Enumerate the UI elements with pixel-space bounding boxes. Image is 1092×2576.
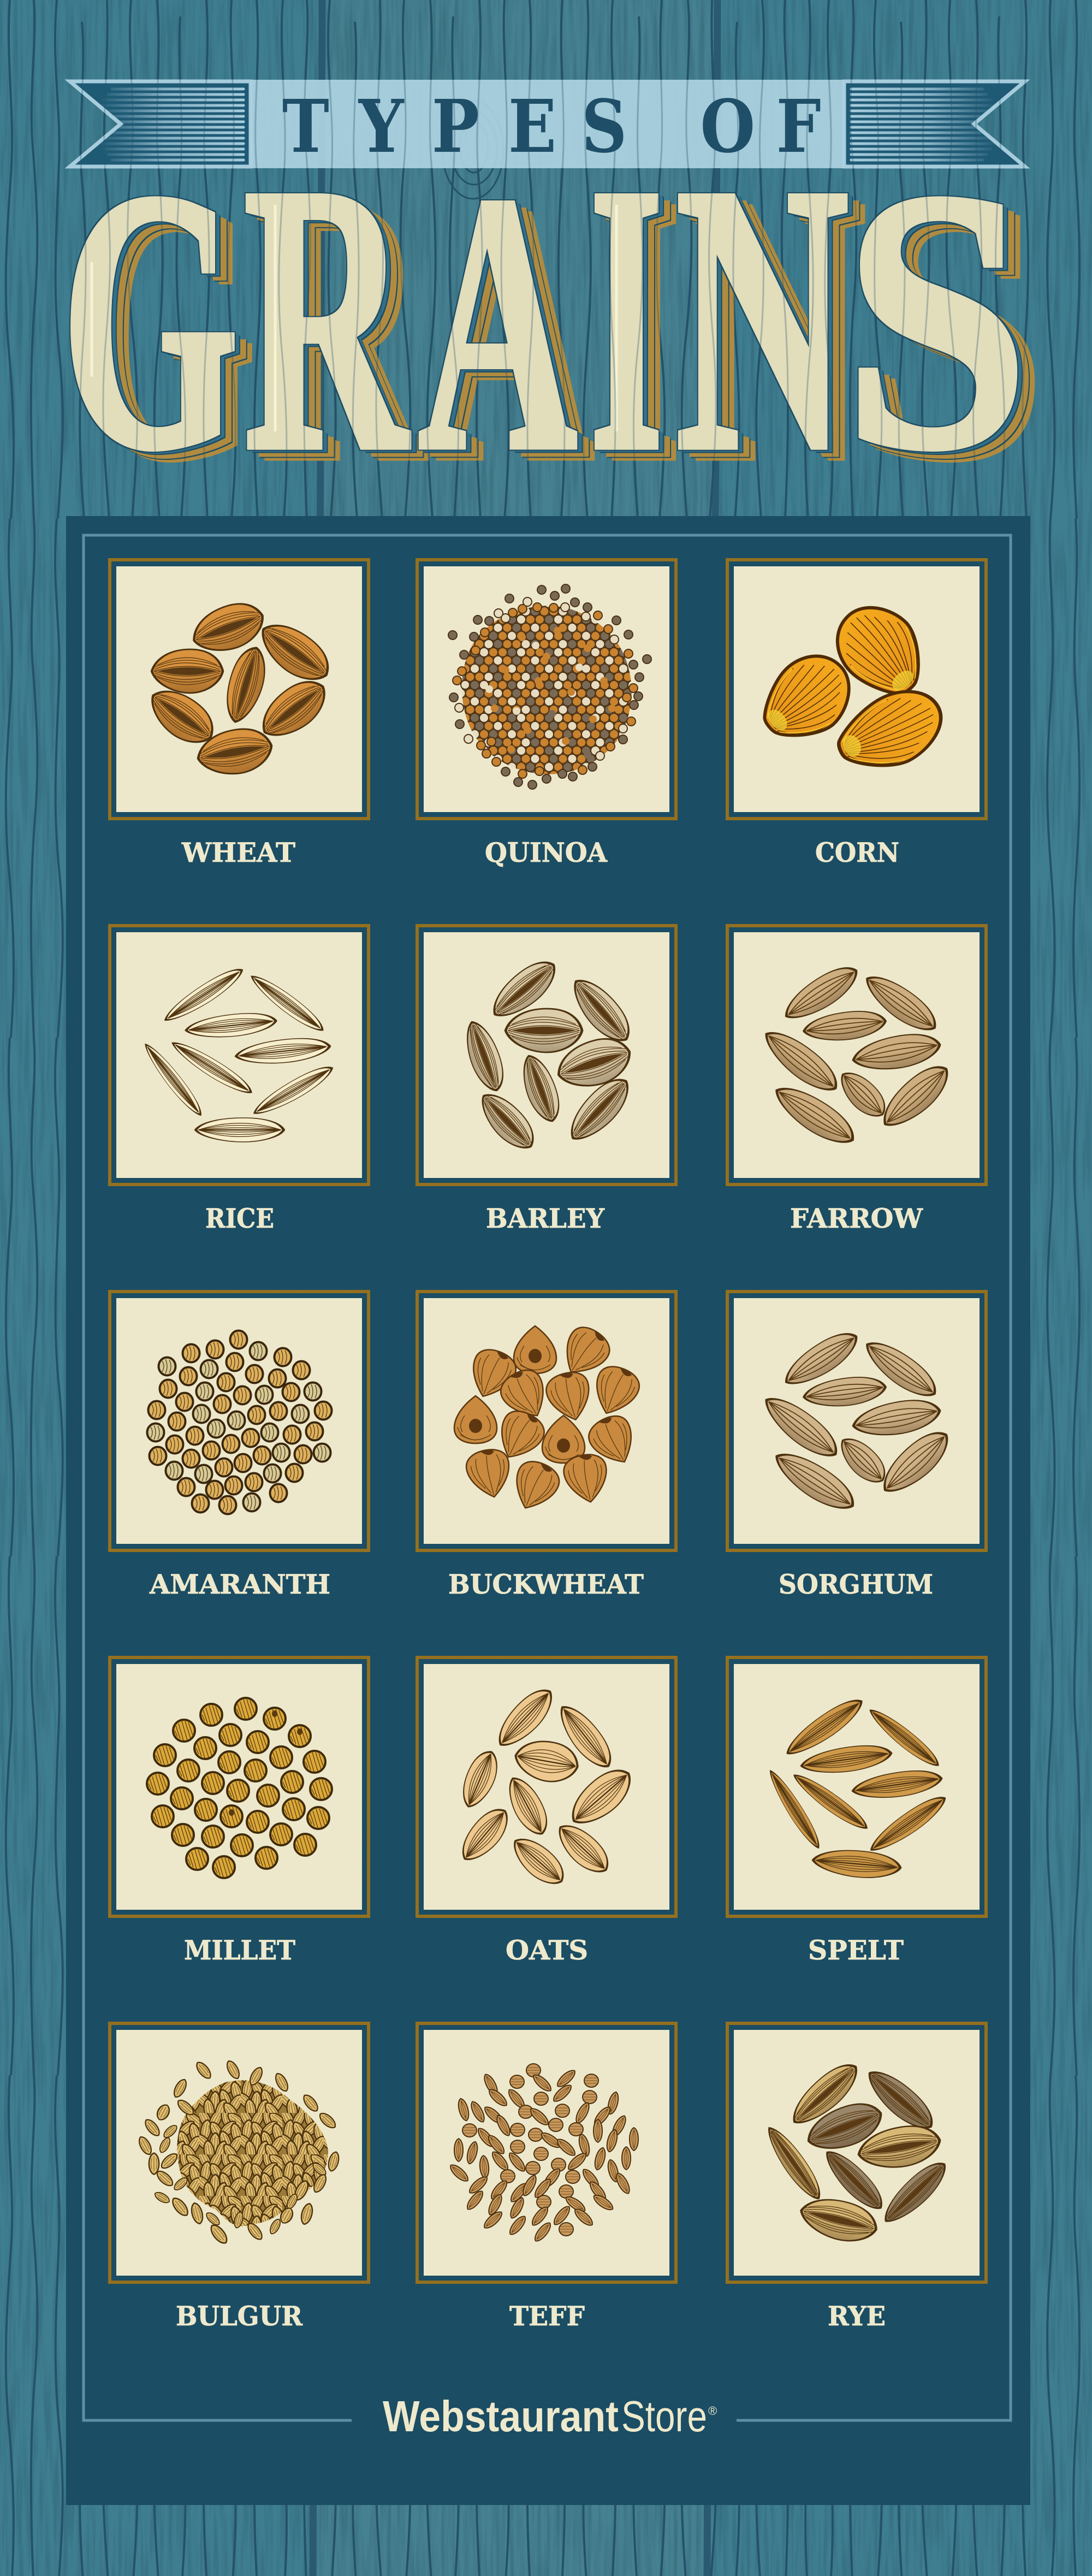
icon: buckwheat groats xyxy=(454,1320,644,1517)
card: rice xyxy=(110,926,369,1234)
main panel xyxy=(66,516,1030,2505)
card: quinoa xyxy=(417,560,676,868)
label: rye: RYE xyxy=(828,2300,886,2332)
card: bulgur xyxy=(110,2023,369,2332)
icon: spelt grains xyxy=(765,1693,950,1881)
heading: TYPES OF: TYPES OF xyxy=(282,84,821,169)
card: rye xyxy=(727,2023,986,2332)
label: farrow: FARROW xyxy=(790,1203,923,1234)
title: GRAINS: N xyxy=(675,106,849,530)
icon: amaranth seeds xyxy=(147,1330,332,1514)
ribbon centre band xyxy=(251,80,844,168)
frame xyxy=(727,926,986,1185)
label: amaranth: AMARANTH xyxy=(149,1568,330,1600)
icon: corn kernels xyxy=(747,590,953,784)
card: spelt xyxy=(727,1657,986,1966)
logo: WebstaurantStore: ® xyxy=(708,2404,717,2418)
label: millet: MILLET xyxy=(184,1934,295,1966)
icon: millet seeds xyxy=(147,1698,332,1878)
frame xyxy=(110,560,369,819)
ribbon right tail xyxy=(844,81,1025,167)
logo: WebstaurantStore: Webstaurant xyxy=(383,2392,619,2441)
frame xyxy=(417,1292,676,1550)
frame xyxy=(727,560,986,819)
logo: WebstaurantStore: Store xyxy=(621,2392,707,2441)
label: rice: RICE xyxy=(205,1203,274,1234)
icon: bulgur pieces xyxy=(136,2059,341,2246)
frame xyxy=(110,2023,369,2282)
title: GRAINS xyxy=(61,106,1029,530)
card: corn xyxy=(727,560,986,868)
frame xyxy=(727,2023,986,2282)
label: quinoa: QUINOA xyxy=(485,837,608,868)
card: amaranth xyxy=(110,1292,369,1600)
card: oats xyxy=(417,1657,676,1966)
card: wheat xyxy=(110,560,369,868)
label: buckwheat: BUCKWHEAT xyxy=(448,1568,644,1600)
frame xyxy=(727,1292,986,1550)
frame xyxy=(110,1657,369,1916)
icon: rice grains xyxy=(140,963,336,1142)
title: GRAINS: G xyxy=(61,115,239,526)
label: teff: TEFF xyxy=(509,2300,585,2332)
card: barley xyxy=(417,926,676,1234)
card: teff xyxy=(417,2023,676,2332)
card: buckwheat xyxy=(417,1292,676,1600)
icon: oat grains xyxy=(454,1682,639,1892)
card: millet xyxy=(110,1657,369,1966)
label: bulgur: BULGUR xyxy=(176,2300,303,2332)
label: spelt: SPELT xyxy=(808,1934,904,1966)
icon: barley grains xyxy=(459,953,638,1157)
frame xyxy=(417,560,676,819)
title: GRAINS: R xyxy=(244,106,410,530)
frame xyxy=(417,1657,676,1916)
label: corn: CORN xyxy=(815,837,899,868)
ribbon left tail xyxy=(70,81,251,167)
icon: teff seeds xyxy=(448,2064,638,2243)
title: GRAINS: I xyxy=(590,107,663,530)
icon: wheat kernels xyxy=(141,596,338,780)
card: farrow xyxy=(727,926,986,1234)
title: GRAINS: A xyxy=(418,119,577,527)
frame xyxy=(110,926,369,1185)
banner ribbon xyxy=(70,80,1025,169)
label: wheat: WHEAT xyxy=(181,837,295,868)
frame xyxy=(417,2023,676,2282)
title highlights xyxy=(92,205,616,431)
icon: farrow grains xyxy=(757,959,957,1152)
card: sorghum xyxy=(727,1292,986,1600)
label: sorghum: SORGHUM xyxy=(779,1568,933,1600)
frame xyxy=(417,926,676,1185)
label: oats: OATS xyxy=(506,1934,588,1966)
title: GRAINS: S xyxy=(844,114,1029,525)
frame xyxy=(110,1292,369,1550)
icon: quinoa seeds xyxy=(453,589,647,785)
icon: sorghum grains xyxy=(757,1325,957,1518)
frame xyxy=(727,1657,986,1916)
icon: rye grains xyxy=(761,2056,953,2248)
label: barley: BARLEY xyxy=(486,1203,605,1234)
